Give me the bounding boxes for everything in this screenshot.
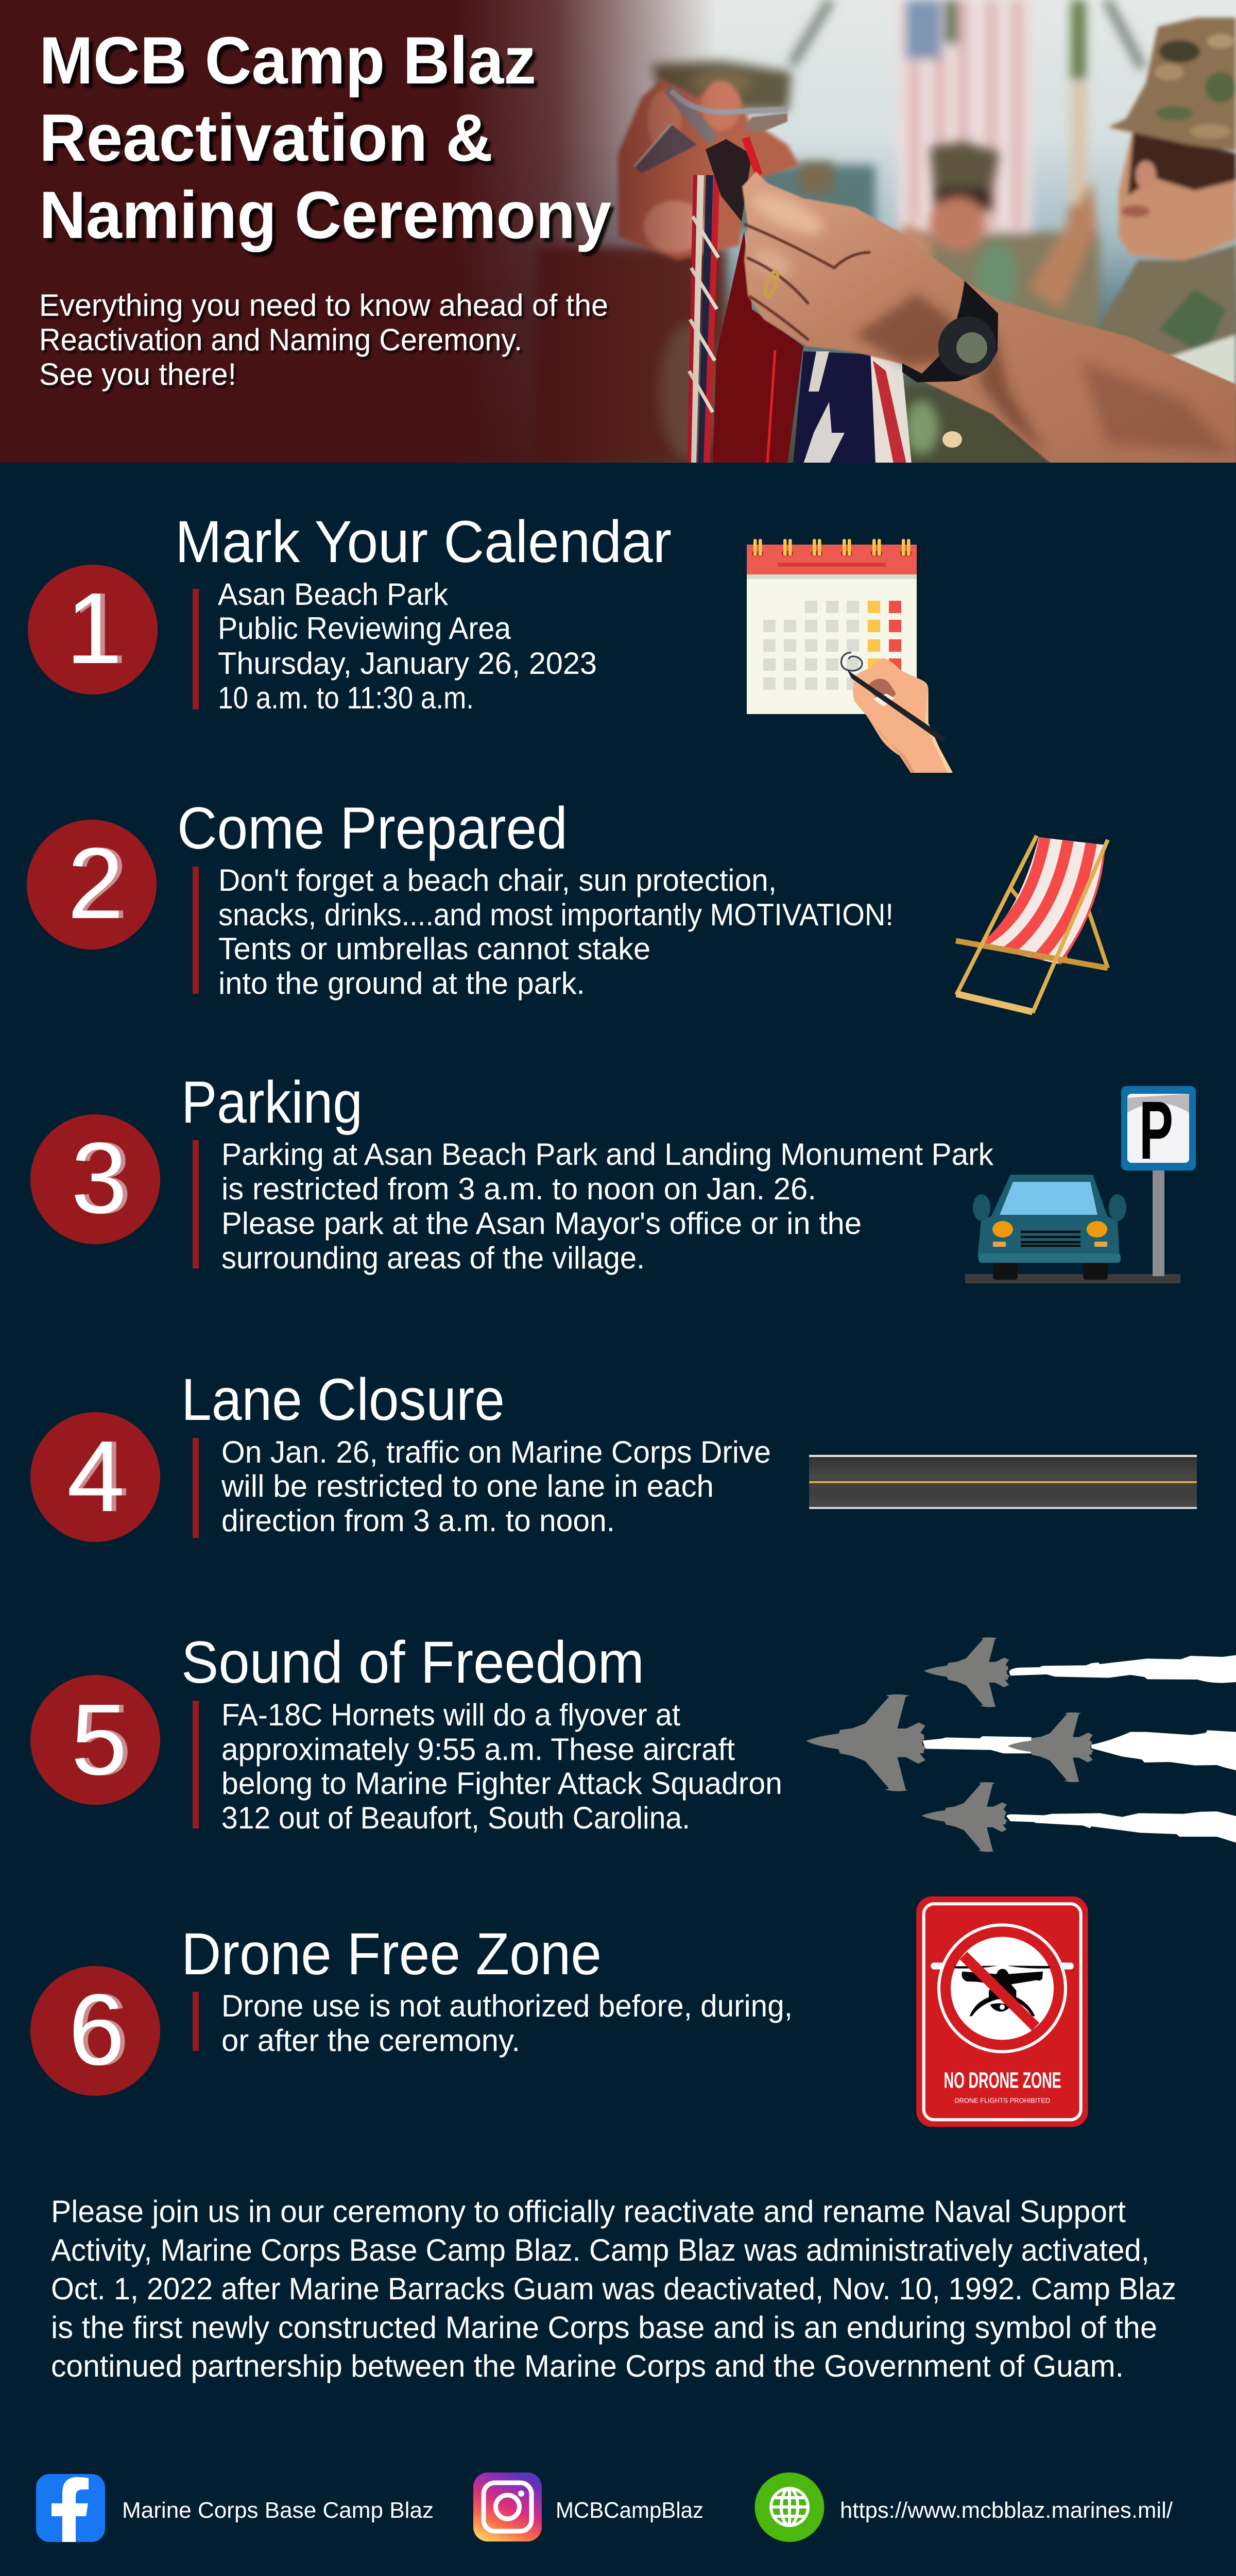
heading: lane closure: Lane Closure (181, 1367, 505, 1433)
packing advice: Don't forget a beach chair, sun protection, (218, 863, 777, 897)
subtitle: Reactivation and Naming Ceremony. (39, 323, 522, 357)
icon: no drone zone sign: NO DRONE ZONE (944, 2069, 1061, 2093)
parking notice: Please park at the Asan Mayor's office or in the (221, 1206, 862, 1241)
number badge 4: 4 (67, 1420, 125, 1533)
number badge 1: 1 (66, 572, 122, 685)
social links (36, 2472, 1173, 2542)
invitation paragraph: Please join us in our ceremony to officially reactivate and rename Naval Support (51, 2194, 1126, 2229)
invitation paragraph (51, 2194, 1176, 2383)
icon: no drone zone sign (916, 1896, 1088, 2127)
title: Reactivation & (39, 100, 493, 175)
parking notice: is restricted from 3 a.m. to noon on Jan. 26. (221, 1172, 816, 1206)
parking notice: Parking at Asan Beach Park and Landing Monument Park (221, 1137, 994, 1172)
packing advice: into the ground at the park. (218, 966, 585, 1001)
closure notice: will be restricted to one lane in each (221, 1469, 714, 1503)
packing advice: snacks, drinks....and most importantly MOTIVATION! (218, 897, 894, 932)
accent bar (193, 589, 199, 709)
step 2: come prepared (27, 795, 1110, 1013)
number badge 6: 6 (68, 1973, 125, 2086)
subtitle: Everything you need to know ahead of the (39, 288, 608, 323)
number badge 2 (27, 820, 157, 950)
wedding ring (763, 270, 780, 298)
flyover notice: FA-18C Hornets will do a flyover at (221, 1698, 680, 1732)
accent bar (193, 1992, 199, 2051)
icon: no drone zone sign: DRONE FLIGHTS PROHIBITED (954, 2097, 1050, 2105)
title: MCB Camp Blaz (39, 23, 536, 98)
invitation paragraph: Oct. 1, 2022 after Marine Barracks Guam was deactivated, Nov. 10, 1992. Camp Blaz (51, 2272, 1176, 2306)
number badge 3 (30, 1114, 160, 1244)
icon: calendar with hand (747, 539, 953, 773)
flag folds at the bottom (793, 350, 912, 464)
drone notice: Drone use is not authorized before, during, (221, 1989, 793, 2023)
event details (218, 577, 597, 715)
foreground soldier (1091, 18, 1236, 392)
flyover notice (221, 1698, 782, 1835)
scabbard clip (634, 89, 787, 173)
icon: website globe (755, 2472, 824, 2542)
icon: road (809, 1454, 1197, 1509)
drone notice: or after the ceremony. (221, 2023, 520, 2058)
step 4: lane closure (30, 1367, 1197, 1542)
number badge 5 (30, 1675, 160, 1805)
title (39, 23, 611, 252)
accent bar (193, 867, 199, 994)
icon: car at parking sign: P (1139, 1084, 1173, 1176)
invitation paragraph: is the first newly constructed Marine Corps base and is an enduring symbol of the (51, 2310, 1157, 2345)
event details: Asan Beach Park (218, 577, 449, 612)
heading: come prepared: Come Prepared (177, 795, 568, 861)
packing advice (218, 863, 894, 1001)
parking notice: surrounding areas of the village. (221, 1241, 645, 1275)
invitation paragraph: continued partnership between the Marine Corps and the Government of Guam. (51, 2349, 1124, 2383)
label: website: https://www.mcbblaz.marines.mil/ (840, 2498, 1173, 2523)
closure notice (221, 1435, 771, 1538)
heading: drone free zone: Drone Free Zone (181, 1921, 602, 1987)
flyover notice: belong to Marine Fighter Attack Squadron (221, 1766, 782, 1801)
icon: jets with contrails (806, 1637, 1236, 1852)
step 1: mark your calendar (28, 509, 953, 773)
drone notice (221, 1989, 793, 2058)
icon: facebook (36, 2474, 105, 2542)
icon: beach chair (956, 835, 1110, 1013)
finger lines (744, 224, 870, 340)
icon: car at parking sign (965, 1084, 1196, 1283)
subtitle: See you there! (39, 357, 236, 392)
subtitle (39, 288, 608, 392)
number badge 5: 5 (71, 1683, 127, 1796)
event details: 10 a.m. to 11:30 a.m. (218, 681, 474, 715)
heading: mark your calendar: Mark Your Calendar (175, 509, 672, 575)
number badge 6 (30, 1966, 160, 2096)
left hand (618, 80, 799, 260)
heading: parking: Parking (181, 1070, 363, 1136)
closure notice: On Jan. 26, traffic on Marine Corps Drive (221, 1435, 771, 1469)
header photo: marine attaching streamers (412, 0, 1236, 464)
wristwatch (902, 281, 1004, 384)
streamer cords (689, 137, 803, 464)
background soldiers (651, 61, 999, 289)
accent bar (193, 1438, 199, 1538)
packing advice: Tents or umbrellas cannot stake (218, 931, 650, 966)
icon: instagram (473, 2472, 542, 2541)
closure notice: direction from 3 a.m. to noon. (221, 1503, 615, 1538)
parking notice (221, 1137, 994, 1275)
step 6: drone free zone (30, 1896, 1088, 2127)
number badge 2: 2 (67, 827, 124, 940)
step 3: parking (30, 1070, 1196, 1283)
heading: sound of freedom: Sound of Freedom (181, 1630, 644, 1696)
label: instagram: MCBCampBlaz (556, 2498, 703, 2523)
header banner (0, 0, 1236, 464)
flyover notice: 312 out of Beaufort, South Carolina. (221, 1801, 690, 1835)
event details: Public Reviewing Area (218, 611, 511, 646)
number badge 1 (28, 565, 158, 694)
accent bar (193, 1701, 199, 1828)
hand highlights and shading (747, 185, 1231, 453)
number badge 4 (30, 1412, 160, 1542)
title: Naming Ceremony (39, 177, 611, 252)
invitation paragraph: Activity, Marine Corps Base Camp Blaz. Camp Blaz was administratively activated, (51, 2233, 1149, 2267)
main hand and forearm (742, 172, 1236, 464)
number badge 3: 3 (71, 1122, 127, 1234)
flyover notice: approximately 9:55 a.m. These aircraft (221, 1732, 735, 1767)
label: facebook: Marine Corps Base Camp Blaz (122, 2498, 434, 2523)
bokeh highlight (942, 431, 962, 448)
maroon gradient overlay (0, 0, 1236, 463)
event details: Thursday, January 26, 2023 (218, 646, 597, 681)
step 5: sound of freedom (30, 1630, 1236, 1852)
accent bar (193, 1140, 199, 1268)
